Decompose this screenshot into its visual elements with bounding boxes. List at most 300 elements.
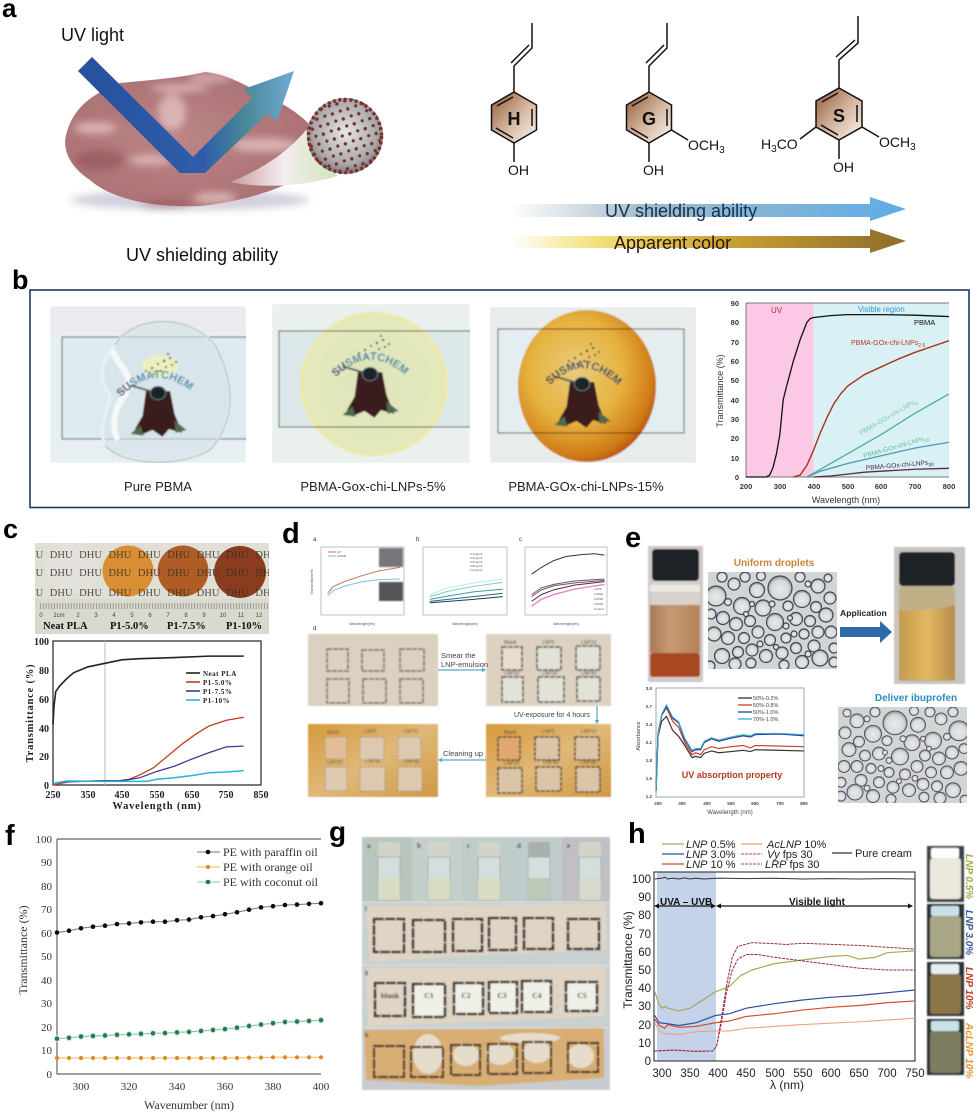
- rotated jar labels: LNP 0.5%: [963, 854, 974, 899]
- photo strip: skin with cream samples: C2: [461, 991, 471, 1000]
- photo: pure PBMA film: [50, 306, 246, 463]
- x tick labels: 320: [121, 1081, 138, 1093]
- label: UV shielding ability: UV shielding ability: [126, 245, 278, 265]
- arrow: UV exposure for 4 hours: [514, 706, 599, 724]
- small chart b: [416, 537, 507, 626]
- y tick labels: 100: [632, 874, 651, 886]
- x tick labels: 340: [169, 1081, 186, 1093]
- photo strip: five vials: c: [467, 842, 470, 850]
- small chart c: c: [519, 537, 522, 543]
- legend: PE with coconut oil: [223, 875, 319, 889]
- legend: Pure cream: [855, 848, 912, 860]
- small chart b: b: [416, 537, 420, 543]
- photo strip: five vials: [362, 837, 610, 902]
- photo: PLA films on DHU print and ruler: 10: [220, 613, 227, 619]
- photo: skin with LNP emulsion: LNP10: [581, 640, 597, 646]
- photo strip: skin with cream samples: g: [365, 970, 368, 976]
- monomer S: CO: [777, 136, 798, 152]
- legend: Vy fps 30: [767, 849, 813, 861]
- chart: PLA transmittance: P1-7.5%: [203, 688, 232, 696]
- label: uniform droplets: Uniform droplets: [734, 558, 815, 569]
- line: paraffin oil: [57, 903, 321, 932]
- monomer S: OCH: [879, 134, 910, 150]
- legend: AcLNP 10%: [766, 839, 827, 851]
- micrograph: ibuprofen droplets: [836, 707, 970, 805]
- photo: PLA films on DHU print and ruler: P1-10%: [226, 621, 262, 632]
- chart: PLA transmittance: Wavelength (nm): [112, 801, 202, 812]
- y tick labels: 30: [41, 998, 52, 1010]
- y tick labels: 80: [41, 881, 52, 893]
- arrow: UV exposure for 4 hours: UV-exposure for 4 hours: [514, 712, 590, 719]
- rotated jar labels: AcLNP 10%: [963, 1022, 974, 1078]
- photo: PLA films on DHU print and ruler: 6: [148, 613, 152, 619]
- photo: PLA films on DHU print and ruler: HU DHU DHU DHU DHU DHU DHU DHU DHU: [28, 550, 279, 561]
- chart: transmittance vs wavelength: 500: [842, 482, 854, 491]
- photo: pure PBMA film: SUSMATCHEM: [116, 370, 194, 397]
- chart: PLA transmittance: 550: [150, 790, 164, 801]
- label: deliver ibuprofen: Deliver ibuprofen: [875, 693, 957, 704]
- photo: PBMA-GOx-chi-LNPs-15% film: SUSMATCHEM: [545, 360, 623, 386]
- photo: PLA films on DHU print and ruler: 7: [166, 613, 170, 619]
- chart: UV absorbance: Wavelength (nm): [707, 810, 753, 816]
- photo: PLA films on DHU print and ruler: 4: [112, 613, 116, 619]
- chart: UV absorbance: 1.2: [646, 794, 652, 799]
- photo: PLA films on DHU print and ruler: 0: [39, 613, 43, 619]
- photo strip: skin with cream samples: blank: [381, 991, 400, 1000]
- photo: PLA films on DHU print and ruler: P1-7.5%: [167, 621, 206, 632]
- chart: PLA transmittance: 100: [34, 637, 49, 648]
- small chart a: [310, 537, 404, 626]
- photo: skin after cleaning: Blank: [327, 730, 340, 736]
- chart: transmittance vs wavelength: [715, 299, 955, 505]
- panel letter f: f: [5, 820, 15, 852]
- small chart c: LNP30: [594, 602, 604, 606]
- chart: PLA transmittance: 650: [184, 790, 200, 801]
- y tick labels: 80: [638, 910, 651, 922]
- x axis title: Wavenumber (nm): [144, 1098, 234, 1112]
- chart: transmittance vs wavelength: Transmittance (%): [715, 354, 725, 428]
- y axis title: Transmittance (%): [16, 905, 30, 995]
- y tick labels: 10: [41, 1045, 52, 1057]
- chart: transmittance vs wavelength: Wavelength (nm): [812, 495, 880, 505]
- chart: transmittance vs wavelength: 30: [928, 462, 934, 469]
- photo: skin after cleaning: LNP10: [403, 729, 419, 735]
- chart: transmittance vs wavelength: 40: [731, 396, 739, 405]
- chart: PLA transmittance: 40: [39, 724, 49, 735]
- x axis title: λ (nm): [770, 1078, 804, 1092]
- chart: transmittance vs wavelength: 20: [731, 434, 739, 443]
- photo: PBMA-Gox-chi-LNPs-5% film: [272, 304, 470, 463]
- y tick labels: [632, 874, 651, 1068]
- chart: UV absorbance: 400: [703, 801, 711, 806]
- chart: UV absorbance: 1.8: [646, 758, 652, 763]
- x tick labels: 360: [217, 1081, 234, 1093]
- photo: jar AcLNP 10%: [927, 1019, 964, 1075]
- small chart b: 1.0mg/ml: [470, 568, 483, 572]
- caption: Pure PBMA: Pure PBMA: [124, 479, 192, 494]
- chart: transmittance vs wavelength: 80: [731, 318, 739, 327]
- photo strip: skin with cream samples: C1: [424, 991, 434, 1000]
- arrow: application: [840, 608, 892, 643]
- frame of panel b: [30, 290, 969, 508]
- monomer H: [492, 23, 536, 178]
- arrow: smear the LNP emulsion: [438, 651, 488, 672]
- small chart a: LNP30: [337, 554, 347, 558]
- photo: PLA films on DHU print and ruler: Neat PLA: [43, 621, 88, 632]
- panel d: LNP emulsion tests: [282, 518, 611, 797]
- y tick labels: 100: [36, 834, 52, 846]
- axes frame: [654, 872, 915, 1061]
- photo: skin with LNP emulsion: LNP30: [542, 671, 558, 677]
- chart: PLA transmittance: Neat PLA: [203, 670, 237, 678]
- y axis title: Transmittance (%): [621, 911, 635, 1009]
- panel letter b: b: [12, 265, 28, 295]
- photo strip: skin after UV exposure: [362, 1028, 610, 1090]
- panel b: PBMA films and transmittance: [12, 265, 970, 508]
- chart: UV absorbance: 2.4: [646, 722, 652, 727]
- monomer S: 3: [910, 142, 916, 153]
- monomer S: 3: [771, 144, 777, 155]
- photo: vial with brown emulsion: [648, 546, 703, 682]
- photo: skin after cleaning: LNP5: [364, 729, 377, 735]
- panel c: PLA films and transmittance: [3, 514, 279, 812]
- monomer H: H: [508, 109, 520, 129]
- chart: transmittance vs wavelength: 50: [731, 376, 739, 385]
- chart: transmittance vs wavelength: 30: [731, 415, 739, 424]
- photo: PLA films on DHU print and ruler: 1cm: [53, 613, 65, 619]
- chart: transmittance vs wavelength: UV: [771, 306, 783, 315]
- axes frame: [57, 839, 321, 1074]
- monomer G: [626, 23, 725, 178]
- x tick labels: [73, 1081, 330, 1093]
- chart: transmittance vs wavelength: 700: [909, 482, 921, 491]
- small chart c: LNP20: [594, 597, 604, 601]
- panel a: UV shielding schematic: [2, 0, 383, 265]
- small chart c: Control: [594, 607, 604, 611]
- small chart b: Wavelength(nm): [452, 622, 478, 626]
- small chart a: a: [313, 537, 317, 543]
- panel letter c: c: [3, 514, 18, 544]
- panel letter h: h: [628, 818, 646, 850]
- label: d: d: [313, 626, 316, 632]
- photo: jar LNP 10%: [927, 962, 964, 1016]
- legend: LRP fps 30: [765, 859, 819, 871]
- small chart b: 0.8mg/ml: [470, 564, 483, 568]
- chart: transmittance vs wavelength: Visible region: [858, 305, 905, 314]
- x tick labels: 550: [793, 1068, 813, 1080]
- y tick labels: 0: [645, 1056, 651, 1068]
- y tick labels: 90: [638, 892, 651, 904]
- y tick labels: 20: [638, 1020, 651, 1032]
- x tick labels: 500: [765, 1068, 785, 1080]
- chart: UV absorbance: 700: [776, 801, 784, 806]
- rotated jar labels: [963, 854, 974, 1078]
- chart: transmittance vs wavelength: PBMA-GOx-chi-LNPs: [866, 460, 928, 472]
- photo: skin after UV exposure: LNP40: [581, 760, 597, 766]
- chart: transmittance vs wavelength: 10: [924, 437, 931, 445]
- chart: transmittance vs wavelength: 400: [808, 482, 820, 491]
- panel f: PE oil transmittance chart: [5, 820, 330, 1112]
- chart: UV absorbance: UV absorption property: [682, 770, 782, 780]
- chart: UV absorbance: 2.7: [646, 704, 652, 709]
- photo: skin after UV exposure: Blank: [504, 730, 517, 736]
- rotated jar labels: LNP 10%: [963, 967, 974, 1010]
- panel a: lignin monomers H G S: [492, 16, 916, 253]
- chart: PLA transmittance: 60: [39, 695, 49, 706]
- y tick labels: 60: [638, 947, 651, 959]
- nanoparticle sphere with LNPs: [307, 98, 383, 174]
- monomer G: 3: [719, 145, 725, 156]
- photo: skin after UV exposure: LNP5: [542, 729, 555, 735]
- y tick labels: [36, 834, 52, 1081]
- y tick labels: 50: [638, 965, 651, 977]
- photo strip: skin with cream samples: C3: [497, 991, 507, 1000]
- photo: skin with LNP emulsion: LNP20: [504, 671, 520, 677]
- line: orange oil: [57, 1056, 321, 1059]
- arrow: apparent color: Apparent color: [614, 233, 731, 253]
- chart: PLA transmittance: 350: [80, 790, 96, 801]
- photo: PLA films on DHU print and ruler: 5: [130, 613, 134, 619]
- legend: LNP 10 %: [686, 859, 736, 871]
- chart: PLA transmittance: 850: [254, 790, 268, 801]
- photo strip: skin with cream samples: C5: [577, 991, 587, 1000]
- panel letter d: d: [282, 518, 300, 550]
- photo: skin with LNP emulsion: LNP5: [542, 640, 555, 646]
- x tick labels: 400: [708, 1068, 728, 1080]
- legend: PE with paraffin oil: [223, 845, 318, 859]
- chart: transmittance vs wavelength: 60: [731, 357, 739, 366]
- photo: skin with LNP emulsion: LNP40: [581, 671, 597, 677]
- x tick labels: [652, 1068, 925, 1080]
- x tick labels: 400: [313, 1081, 330, 1093]
- small chart b: 0.3mg/ml: [470, 556, 483, 560]
- photo: jar LNP 0.5%: [927, 846, 964, 902]
- small chart c: [519, 537, 607, 626]
- arrow: cleaning up: [438, 749, 486, 762]
- chart: transmittance vs wavelength: PBMA: [914, 318, 935, 327]
- chart: UV absorbance: 200: [654, 801, 662, 806]
- chart: UV absorbance: 600: [751, 801, 759, 806]
- illustration: lignin film blob: [65, 72, 320, 210]
- monomer S: S: [833, 106, 845, 126]
- chart: UV absorbance: 50%-0.8%: [753, 703, 778, 709]
- caption: 15% film: PBMA-GOx-chi-LNPs-15%: [508, 479, 664, 494]
- photo: skin after UV exposure: LNP10: [581, 729, 597, 735]
- x tick labels: 650: [849, 1068, 869, 1080]
- photo strip: five vials: a: [367, 842, 371, 850]
- x tick labels: 300: [73, 1081, 90, 1093]
- photo: PLA films on DHU print and ruler: 8: [184, 613, 188, 619]
- chart: PLA transmittance: 0: [44, 781, 49, 792]
- panel e: emulsion droplets: [625, 522, 970, 816]
- small chart c: Wavelength(nm): [553, 622, 579, 626]
- monomer S: [761, 16, 916, 175]
- chart: UV absorbance: [636, 686, 808, 816]
- photo: PLA films on DHU print and ruler: 12: [256, 613, 263, 619]
- photo: skin after cleaning: LNP40: [404, 759, 420, 765]
- monomer G: OCH: [688, 137, 719, 153]
- chart: UV absorbance: 800: [800, 801, 808, 806]
- arrow: UV shielding ability: UV shielding ability: [605, 201, 757, 221]
- panel g: vials and skin tests: [329, 816, 610, 1090]
- chart: PLA transmittance: 20: [39, 752, 49, 763]
- zoom cone to nanoparticle: [230, 130, 338, 186]
- legend: LNP 3.0%: [686, 849, 736, 861]
- arrow: cleaning up: Cleaning up: [443, 749, 483, 758]
- monomer G: G: [642, 109, 656, 129]
- chart: UV absorbance: 50%-1.0%: [753, 710, 778, 716]
- photo: skin after cleaning: LNP20: [327, 760, 343, 766]
- y tick labels: 40: [41, 975, 52, 987]
- chart: UV absorbance: 500: [727, 801, 735, 806]
- photo strip: skin with cream samples: C4: [532, 991, 542, 1000]
- photo: skin before treatment: [308, 634, 438, 706]
- photo: PLA films on DHU print and ruler: P1-5.0%: [110, 621, 149, 632]
- label: UV light: UV light: [61, 25, 124, 45]
- chart: UV absorbance: 50%-0.2%: [753, 696, 778, 702]
- chart: PLA transmittance: 750: [218, 790, 234, 801]
- arrow: apparent color: [510, 229, 906, 253]
- chart: transmittance vs wavelength: 0: [735, 473, 739, 482]
- chart: UV absorbance: Absorbance: [636, 721, 642, 751]
- photo: PLA films on DHU print and ruler: [28, 541, 279, 634]
- caption: 5% film: PBMA-Gox-chi-LNPs-5%: [300, 479, 446, 494]
- micrograph: uniform droplets: [705, 572, 839, 671]
- small chart a: LP: [337, 550, 341, 554]
- photo strip: five vials: b: [417, 842, 421, 850]
- photo: PLA films on DHU print and ruler: 9: [202, 613, 206, 619]
- monomer G: OH: [643, 162, 664, 178]
- photo strip: skin with squares: [362, 902, 610, 965]
- photo: skin with LNP emulsion: [486, 634, 611, 706]
- chart: UV absorbance: 2.1: [646, 740, 652, 745]
- legend: [662, 839, 912, 871]
- x tick labels: 600: [821, 1068, 841, 1080]
- chart: UV absorbance: 3.0: [646, 686, 652, 691]
- visible light range arrow and label: [716, 897, 913, 908]
- chart: transmittance vs wavelength: 5: [914, 401, 920, 407]
- photo strip: skin after UV exposure: h: [365, 1033, 369, 1039]
- photo: PLA films on DHU print and ruler: 11: [238, 613, 245, 619]
- y tick labels: 20: [41, 1022, 52, 1034]
- chart: transmittance vs wavelength: 70: [731, 338, 739, 347]
- y tick labels: 40: [638, 983, 651, 995]
- photo: skin after cleaning: [308, 724, 438, 797]
- photo: PLA films on DHU print and ruler: 3: [94, 613, 98, 619]
- panel letter g: g: [329, 816, 346, 847]
- photo strip: skin with cream samples: [362, 965, 610, 1028]
- x tick labels: 750: [905, 1068, 925, 1080]
- visible light range arrow and label: Visible light: [789, 897, 846, 908]
- photo: vial with yellow cream: [894, 547, 965, 684]
- panel h: cream transmittance and jars: [621, 818, 974, 1092]
- line: coconut oil: [57, 1020, 321, 1039]
- y tick labels: 10: [638, 1038, 651, 1050]
- photo: PLA films on DHU print and ruler: HU DHU DHU DHU DHU DHU DHU DHU DHU: [28, 568, 279, 579]
- photo: skin after cleaning: LNP30: [365, 759, 381, 765]
- chart: transmittance vs wavelength: 10: [731, 454, 739, 463]
- arrow: UV shielding ability: [510, 197, 906, 221]
- monomer S: H: [761, 136, 771, 152]
- UVA-UVB range arrow and label: UVA – UVB: [660, 897, 712, 908]
- photo: skin after UV exposure: LNP30: [543, 760, 559, 766]
- small chart c: LNP10: [594, 592, 604, 596]
- chart: transmittance vs wavelength: 300: [774, 482, 786, 491]
- chart: PLA transmittance: P1-10%: [203, 697, 230, 705]
- y tick labels: 60: [41, 928, 52, 940]
- chart: transmittance vs wavelength: 2.5: [918, 343, 925, 349]
- legend: [197, 845, 319, 889]
- chart: transmittance vs wavelength: 600: [875, 482, 887, 491]
- chart: PLA transmittance: P1-5.0%: [203, 679, 232, 687]
- chart: PLA transmittance: 250: [46, 790, 60, 801]
- chart: PLA transmittance: 80: [39, 666, 49, 677]
- legend: LNP 0.5%: [686, 839, 736, 851]
- curves: [655, 877, 915, 1051]
- photo strip: five vials: d: [517, 842, 521, 850]
- photo: PBMA-GOx-chi-LNPs-15% film: [490, 307, 696, 463]
- chart: UV absorbance: 300: [678, 801, 686, 806]
- photo: jar LNP 3.0%: [927, 904, 964, 959]
- chart: UV absorbance: 1.5: [646, 776, 652, 781]
- legend: PE with orange oil: [223, 860, 313, 874]
- monomer H: OH: [508, 162, 529, 178]
- small chart a: Transmittance%: [310, 569, 314, 595]
- x tick labels: 450: [736, 1068, 756, 1080]
- photo strip: skin with squares: f: [365, 907, 368, 913]
- photo: skin after UV exposure: [486, 724, 611, 797]
- chart: transmittance vs wavelength: 90: [731, 299, 739, 308]
- arrow: smear the LNP emulsion: LNP-emulsion: [441, 660, 488, 669]
- arrow: application: Application: [840, 608, 887, 618]
- small chart b: 0.1mg/ml: [470, 552, 483, 556]
- photo: PLA films on DHU print and ruler: HU DHU DHU DHU DHU DHU DHU DHU DHU: [28, 588, 279, 599]
- chart: UV absorbance: 70%-1.0%: [753, 717, 778, 723]
- arrow: smear the LNP emulsion: Smear the: [441, 651, 476, 660]
- chart: PLA transmittance: 450: [114, 790, 130, 801]
- x tick labels: 700: [877, 1068, 897, 1080]
- rotated jar labels: LNP 3.0%: [963, 910, 974, 955]
- small chart b: 0.5mg/ml: [470, 560, 483, 564]
- small chart c: LNP5: [594, 587, 602, 591]
- chart: transmittance vs wavelength: 200: [740, 482, 752, 491]
- UVA-UVB band: [657, 872, 716, 1061]
- photo: skin after UV exposure: LNP20: [504, 761, 520, 767]
- chart: transmittance vs wavelength: PBMA-GOx-chi-LNPs: [858, 399, 916, 437]
- photo strip: five vials: e: [567, 842, 570, 850]
- small chart a: Wavelength(nm): [349, 622, 375, 626]
- photo: PBMA-Gox-chi-LNPs-5% film: SUSMATCHEM: [331, 352, 410, 377]
- chart: PLA transmittance: Transmittance (%): [25, 664, 36, 762]
- y tick labels: 0: [46, 1069, 52, 1081]
- chart: PLA transmittance: [25, 637, 268, 812]
- monomer S: OH: [833, 159, 854, 175]
- photo: PLA films on DHU print and ruler: 2: [76, 613, 80, 619]
- x tick labels: 350: [680, 1068, 700, 1080]
- arrow: reflected UV light: [78, 57, 294, 173]
- chart: transmittance vs wavelength: PBMA-GOx-chi-LNPs: [863, 436, 925, 460]
- x tick labels: 380: [265, 1081, 282, 1093]
- photo: skin with LNP emulsion: Blank: [504, 640, 517, 646]
- chart: transmittance vs wavelength: 800: [943, 482, 955, 491]
- y tick labels: 30: [638, 1001, 651, 1013]
- y tick labels: 70: [41, 904, 52, 916]
- x tick labels: 300: [652, 1068, 672, 1080]
- y tick labels: 50: [41, 951, 52, 963]
- panel letter e: e: [625, 522, 641, 554]
- y tick labels: 90: [41, 857, 52, 869]
- chart: transmittance vs wavelength: PBMA-GOx-chi-LNPs: [851, 340, 918, 347]
